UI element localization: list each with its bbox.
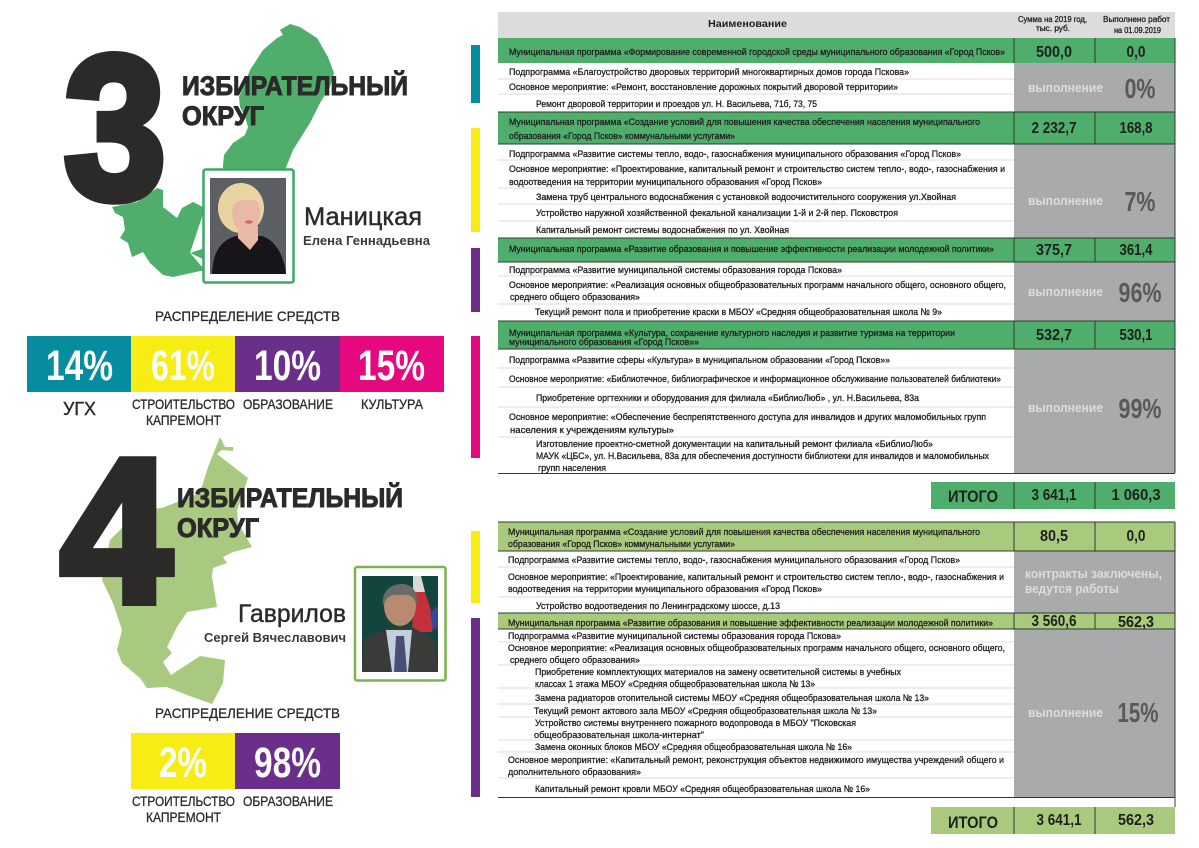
row texts, district 4: Подпрограмма «Развитие муниципальной системы образования города Пскова» [508,631,841,642]
row texts, district 4: дополнительного образования» [508,767,641,778]
row texts, district 3: Муниципальная программа «Создание условий для повышения качества обеспечения населения муниципального [509,117,980,128]
row texts, district 3: водоотведения на территории муниципального образования «Город Псков» [509,177,822,188]
row texts, district 4: образования «Город Псков» коммунальными услугами» [508,539,735,550]
name: Гаврилов: Гаврилов [238,600,346,628]
amounts, district 3: 168,8 [1120,120,1153,137]
amounts, district 4: 3 560,6 [1032,613,1077,630]
tiles: funds distribution, district 3: 15% [358,342,425,390]
row texts, district 4: Капитальный ремонт кровли МБОУ «Средняя общеобразовательная школа № 16» [535,784,870,795]
large number 3: 3 [64,14,166,242]
amounts, district 3: 532,7 [1036,327,1072,344]
heading: district 4: ИЗБИРАТЕЛЬНЫЙ [177,483,403,513]
amounts, district 3: 0,0 [1126,44,1146,61]
table header [498,12,1175,38]
heading: district 4 [177,483,403,543]
heading: district 3: ОКРУГ [182,101,264,131]
row texts, district 3: Основное мероприятие: «Обеспечение беспрепятственного доступа для инвалидов и других маломобильных групп [509,412,986,423]
amounts, district 4: 80,5 [1040,528,1068,545]
heading: district 3 [182,71,408,131]
map: district 3 [112,24,334,277]
amounts, district 3: 2 232,7 [1032,120,1076,137]
tiles: funds distribution, district 4 [131,733,340,789]
completion labels, district 3 [1028,73,1162,424]
amounts, district 3: 530,1 [1120,327,1153,344]
heading: district 4: ОКРУГ [177,513,259,543]
category colour bars [471,45,480,797]
row texts, district 3: Устройство наружной хозяйственной фекальной канализации 1-й и 2-й пер. Псковстроя [536,208,898,219]
row texts, district 4: Основное мероприятие: «Проектирование, капитальный ремонт и строительство систем тепло-, водо-, газоснабжения и [508,572,1004,583]
amounts, district 3: 361,4 [1120,242,1153,259]
table: district 4 [498,522,1175,834]
amounts, district 3: 500,0 [1036,44,1072,61]
tile labels, district 4: ОБРАЗОВАНИЕ [243,793,333,809]
row texts, district 3: Подпрограмма «Развитие системы тепло, водо-, газоснабжения муниципального образования «Город Псков» [509,149,961,160]
completion labels, district 3: выполнение [1028,400,1103,415]
tiles: funds distribution, district 3: 10% [254,342,321,390]
row texts, district 3 [509,47,1006,474]
tiles: funds distribution, district 3: 61% [151,342,215,390]
portrait: Маницкая [204,170,294,282]
row texts, district 4: водоотведения на территории муниципального образования «Город Псков» [508,584,822,595]
table header: Наименование [708,19,787,30]
tile labels, district 4: СТРОИТЕЛЬСТВО [132,793,235,809]
completion labels, district 4: контракты заключены, [1025,566,1162,581]
row texts, district 3: Ремонт дворовой территории и проездов ул. Н. Васильева, 71б, 73, 75 [536,99,817,110]
table header: Выполнено работ [1103,15,1170,24]
completion labels, district 3: 96% [1118,277,1162,308]
total row, district 3: 3 641,1 [1032,487,1077,504]
row texts, district 3: Подпрограмма «Благоустройство дворовых территорий многоквартирных домов города Пскова» [509,67,909,78]
tile labels, district 4 [132,793,333,825]
total row, district 3: ИТОГО [948,487,998,506]
programme rows, district 4 [498,522,1175,629]
total row, district 4: 3 641,1 [1036,812,1082,829]
subheading: funds distribution, district 4: РАСПРЕДЕЛЕНИЕ СРЕДСТВ [155,705,340,721]
total row, district 4: ИТОГО [948,813,998,832]
completion labels, district 4: ведутся работы [1025,581,1119,596]
total row, district 4 [931,807,1175,834]
name: Маницкая: Елена Геннадьевна [303,233,431,248]
total row, district 4: 562,3 [1118,812,1154,829]
tile labels, district 3: КУЛЬТУРА [361,396,424,412]
row texts, district 3: Приобретение оргтехники и оборудования для филиала «БиблиоЛюб» , ул. Н.Васильева, 83а [536,393,920,404]
amounts, district 4 [1032,528,1154,631]
amounts, district 4: 0,0 [1126,528,1146,545]
completion cells, district 3 [1014,63,1175,473]
amounts, district 3 [1032,44,1153,344]
row texts, district 3: Муниципальная программа «Формирование современной городской среды муниципального образования «Город Псков» [509,47,1005,58]
row texts, district 3: образования «Город Псков» коммунальными услугами» [509,131,735,142]
table header: Сумма на 2019 год, [1018,15,1087,24]
tile labels, district 4: КАПРЕМОНТ [146,809,221,825]
tiles: funds distribution, district 3 [27,336,444,392]
heading: district 3: ИЗБИРАТЕЛЬНЫЙ [182,71,408,101]
completion cells, district 4 [1014,551,1175,797]
completion labels, district 3: 99% [1118,393,1162,424]
row texts, district 3: Основное мероприятие: «Библиотечное, библиографическое и информационное обслуживание пользователей библиотеки» [509,374,1001,385]
row texts, district 4: общеобразовательная школа-интернат" [534,730,704,741]
row texts, district 4 [508,527,1005,795]
tiles: funds distribution, district 3: 14% [46,342,113,390]
tiles: funds distribution, district 4: 98% [254,739,321,787]
row texts, district 3: Муниципальная программа «Культура, сохранение культурного наследия и развитие туризма на территории [509,328,955,339]
row texts, district 3: Замена труб центрального водоснабжения с установкой водоочистительного сооружения ул.Хвойная [536,192,956,203]
row texts, district 3: групп населения [538,463,606,474]
completion labels, district 3: выполнение [1028,193,1103,208]
completion labels, district 4 [1025,566,1162,728]
row texts, district 4: Муниципальная программа «Создание условий для повышения качества обеспечения населения муниципального [508,527,980,538]
row texts, district 4: классах 1 этажа МБОУ «Средняя общеобразовательная школа № 13» [535,679,815,690]
name: Гаврилов [204,600,346,645]
tiles: funds distribution, district 4: 2% [159,739,207,787]
row texts, district 3: населения к учреждениям культуры» [510,425,674,436]
row texts, district 3: Капитальный ремонт системы водоснабжения по ул. Хвойная [536,225,789,236]
completion labels, district 4: 15% [1118,697,1159,728]
row texts, district 4: Муниципальная программа «Развитие образования и повышение эффективности реализации молодежной политики» [508,618,993,629]
tile labels, district 3 [63,396,424,428]
row texts, district 3: Подпрограмма «Развитие сферы «Культура» в муниципальном образовании «Город Псков»» [509,355,890,366]
name: Гаврилов: Сергей Вячеславович [204,630,346,645]
name: Маницкая [303,203,431,248]
amounts, district 3: 375,7 [1036,242,1072,259]
completion labels, district 3: выполнение [1028,80,1103,95]
tile labels, district 3: СТРОИТЕЛЬСТВО [132,396,235,412]
row texts, district 3: Основное мероприятие: «Реализация основных общеобразовательных программ начального общего, основного общего, [509,280,1006,291]
row texts, district 3: Муниципальная программа «Развитие образования и повышение эффективности реализации молодежной политики» [509,244,994,255]
row texts, district 4: Устройство водоотведения по Ленинградскому шоссе, д.13 [536,601,780,612]
total row, district 3: 1 060,3 [1112,487,1161,504]
row texts, district 3: Подпрограмма «Развитие муниципальной системы образования города Пскова» [509,265,842,276]
row texts, district 4: Текущий ремонт актового зала МБОУ «Средняя общеобразовательная школа № 13» [534,706,877,717]
programme rows, district 3 [498,38,1175,349]
tile labels, district 3: КАПРЕМОНТ [146,412,221,428]
row texts, district 3: Основное мероприятие: «Проектирование, капитальный ремонт и строительство систем тепло-, водо-, газоснабжения и [509,164,1005,175]
completion labels, district 3: 0% [1124,73,1156,104]
table: district 3 [498,12,1175,509]
completion labels, district 4: выполнение [1028,705,1103,720]
row texts, district 4: Основное мероприятие: «Реализация основных общеобразовательных программ начального общего, основного общего, [508,643,1005,654]
row texts, district 4: Устройство системы внутреннего пожарного водопровода в МБОУ "Псковская [535,718,856,729]
tile labels, district 3: УГХ [63,399,96,419]
row texts, district 3: Текущий ремонт пола и приобретение краски в МБОУ «Средняя общеобразовательная школа № 9» [535,307,942,318]
large number 4: 4 [60,416,172,646]
row texts, district 4: Замена оконных блоков МБОУ «Средняя общеобразовательная школа № 16» [535,742,852,753]
row texts, district 3: среднего общего образования» [510,292,640,303]
amounts, district 4: 562,3 [1118,614,1154,631]
row texts, district 4: Подпрограмма «Развитие системы тепло, водо-, газоснабжения муниципального образования «Город Псков» [508,555,960,566]
table header: на 01.09.2019 [1114,26,1161,35]
row texts, district 4: Замена радиаторов отопительной системы МБОУ «Средняя общеобразовательная школа № 13» [535,693,929,704]
portrait: Гаврилов [355,567,446,680]
map: district 4 [102,437,252,704]
table header: тыс. руб. [1036,24,1070,33]
tile labels, district 3: ОБРАЗОВАНИЕ [243,396,333,412]
row texts, district 4: Основное мероприятие: «Капитальный ремонт, реконструкция объектов недвижимого имущества учреждений общего и [508,755,1004,766]
row texts, district 4: среднего общего образования» [510,655,640,666]
total row, district 3 [931,482,1175,509]
subheading: funds distribution, district 3: РАСПРЕДЕЛЕНИЕ СРЕДСТВ [155,308,340,324]
row texts, district 3: МАУК «ЦБС», ул. Н.Васильева, 83а для обеспечения доступности библиотеки для инвалидов и маломобильных [536,451,989,462]
row texts, district 3: Основное мероприятие: «Ремонт, восстановление дорожных покрытий дворовой территории» [509,82,898,93]
completion labels, district 3: выполнение [1028,284,1103,299]
row texts, district 3: муниципального образования «Город Псков»» [509,337,699,348]
row texts, district 3: Изготовление проектно-сметной документации на капитальный ремонт филиала «БиблиоЛюб» [536,439,933,450]
completion labels, district 3: 7% [1124,186,1156,217]
name: Маницкая: Маницкая [304,203,422,231]
row texts, district 4: Приобретение комплектующих материалов на замену осветительной системы в учебных [535,667,901,678]
